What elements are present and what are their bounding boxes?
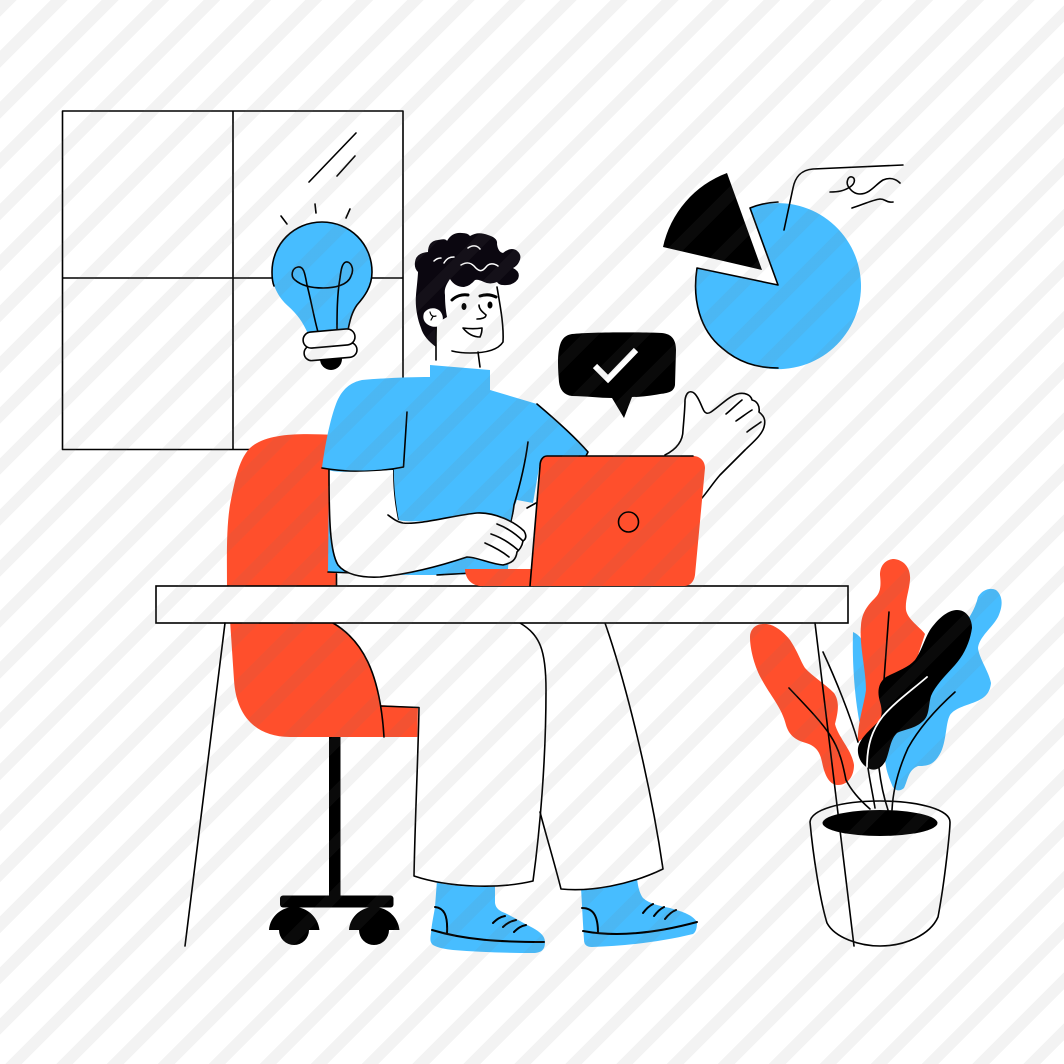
leaf: blue left xyxy=(853,632,868,725)
plant pot xyxy=(810,801,950,946)
chair xyxy=(227,434,419,945)
left shoe xyxy=(430,880,545,953)
laptop screen xyxy=(530,456,705,586)
chair seat edge xyxy=(381,705,419,737)
face xyxy=(430,283,503,353)
desk xyxy=(156,586,848,946)
shirt lower line xyxy=(328,572,470,586)
eyes xyxy=(462,303,466,310)
chair base xyxy=(280,896,394,908)
pie chart xyxy=(663,165,903,369)
eyebrows xyxy=(452,295,496,300)
speech bubble with check xyxy=(558,332,676,418)
left arm xyxy=(329,470,526,577)
pants xyxy=(333,623,663,890)
leaf: blue right xyxy=(885,589,1002,790)
desk leg right xyxy=(815,623,854,946)
chair post xyxy=(329,737,340,896)
window xyxy=(62,111,403,450)
pie body xyxy=(695,203,861,369)
shoes xyxy=(430,878,697,953)
icon: check mark xyxy=(595,350,636,379)
shirt xyxy=(322,365,588,586)
jaw and neck lines xyxy=(436,287,503,367)
ear xyxy=(423,308,443,327)
chair backrest lower xyxy=(230,620,384,737)
nose xyxy=(477,305,486,319)
annotation line xyxy=(784,165,903,230)
torso gap xyxy=(508,500,533,569)
annotation scribbles xyxy=(830,177,900,208)
mouth xyxy=(463,328,482,337)
hair xyxy=(415,233,520,347)
plant xyxy=(750,559,1002,946)
head xyxy=(415,233,520,367)
leaf: left orange xyxy=(750,624,854,785)
laptop xyxy=(465,456,705,586)
hair highlights xyxy=(434,246,498,271)
plant stems xyxy=(789,612,955,810)
soil xyxy=(822,810,938,836)
raised hand xyxy=(660,392,765,500)
pie slice xyxy=(663,173,762,270)
neck xyxy=(436,325,480,370)
chair backrest upper xyxy=(227,434,337,590)
icon: light bulb xyxy=(272,204,372,370)
white leaf vein xyxy=(867,677,927,767)
right shoe xyxy=(581,878,697,947)
leaf: black xyxy=(858,610,972,770)
chair wheels xyxy=(269,907,400,945)
laptop base xyxy=(465,569,533,586)
laptop logo xyxy=(618,512,638,532)
leaf: center orange xyxy=(858,559,925,742)
